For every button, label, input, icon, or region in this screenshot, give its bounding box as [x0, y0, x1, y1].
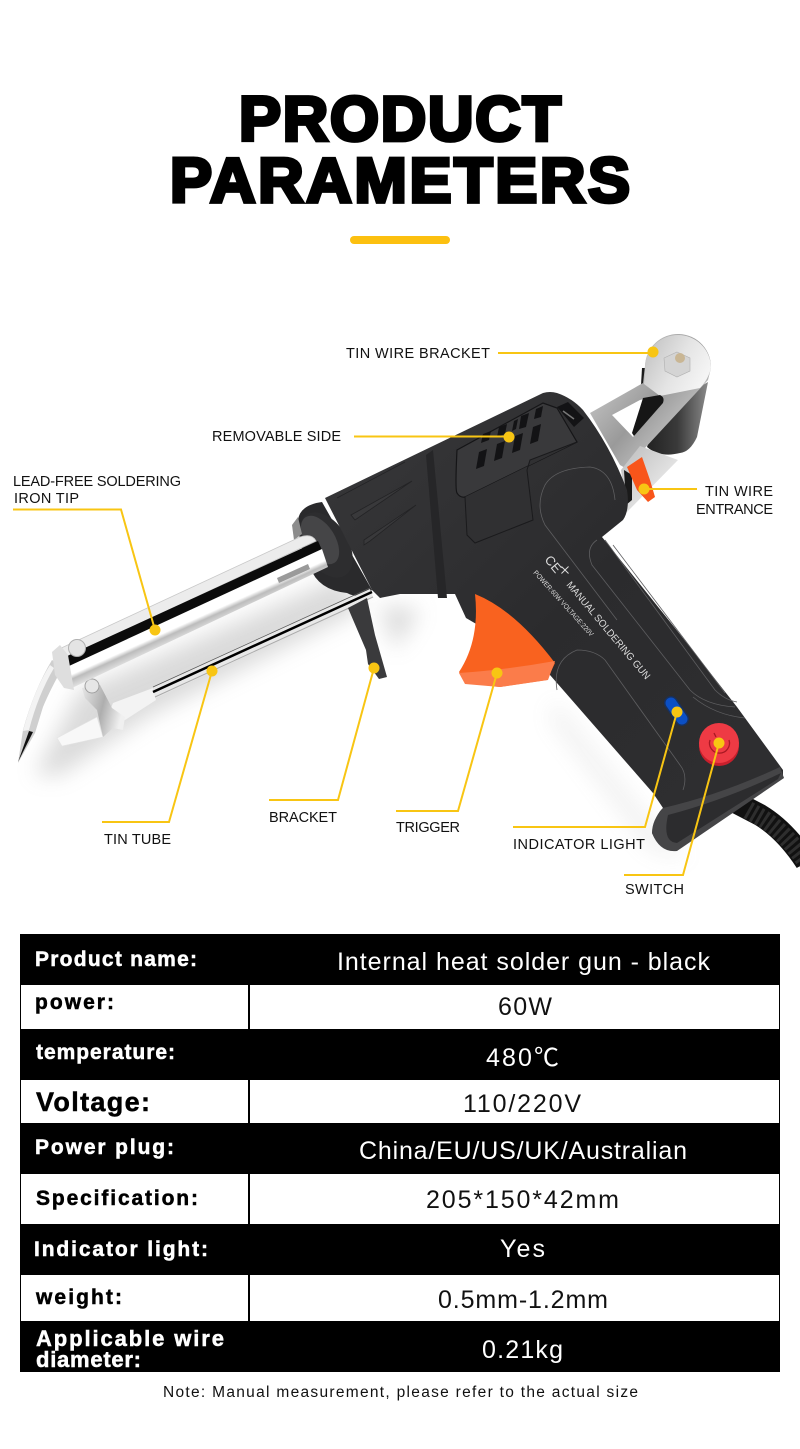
tip — [18, 660, 63, 763]
product image: soldering gun — [18, 334, 800, 862]
callout: tin wire bracket: TIN WIRE BRACKET — [346, 346, 490, 362]
bracket — [348, 598, 387, 679]
indicator light — [671, 703, 682, 719]
callout: removable side — [212, 429, 514, 445]
tin tube nozzle — [57, 679, 156, 746]
title — [170, 84, 630, 216]
row: power plug: China/EU/US/UK/Australian — [359, 1137, 687, 1165]
callout: lead-free soldering iron tip: IRON TIP — [14, 491, 79, 507]
CE marking: POWER:60W VOLTAGE:220V — [532, 570, 594, 638]
row: product name: Product name: — [35, 948, 197, 971]
row: applicable wire diameter: 0.21kg — [482, 1336, 563, 1364]
callout: tin wire entrance — [638, 484, 773, 518]
row: temperature: 480℃ — [486, 1044, 559, 1072]
row: power plug: Power plug: — [35, 1136, 174, 1159]
row: weight — [35, 1286, 608, 1314]
callout: trigger: TRIGGER — [396, 820, 460, 836]
parameter table — [20, 934, 780, 1372]
row: temperature: temperature: — [36, 1041, 175, 1064]
row: voltage: 110/220V — [463, 1090, 581, 1118]
row: applicable wire diameter — [36, 1326, 563, 1372]
callout: tin wire entrance: TIN WIRE — [705, 484, 773, 500]
top wire bracket — [590, 334, 711, 512]
hex nut — [664, 352, 690, 377]
vents — [476, 402, 584, 469]
callout: tin tube: TIN TUBE — [104, 832, 171, 848]
CE marking — [532, 552, 652, 682]
callout: tin tube — [102, 666, 218, 848]
collar — [288, 502, 372, 596]
row: temperature — [36, 1041, 559, 1072]
trigger — [459, 594, 555, 687]
wire entrance clip — [624, 457, 655, 505]
callout: indicator light — [513, 706, 682, 853]
callout: tin wire bracket — [346, 346, 658, 362]
row: applicable wire diameter: diameter: — [36, 1347, 141, 1372]
row: voltage: Voltage: — [36, 1087, 150, 1117]
gun body — [325, 392, 783, 850]
callout: trigger — [396, 668, 502, 836]
grip base inner — [666, 773, 781, 843]
row: power: 60W — [498, 993, 552, 1021]
callout: switch: SWITCH — [625, 882, 684, 898]
title accent bar — [350, 236, 450, 244]
row: product name — [35, 948, 710, 976]
title: PRODUCT — [239, 84, 561, 154]
callout: removable side: REMOVABLE SIDE — [212, 429, 341, 445]
row: weight: weight: — [35, 1286, 122, 1309]
callout: tin wire entrance: ENTRANCE — [696, 502, 773, 518]
body panels and ridges — [337, 403, 745, 790]
row: applicable wire diameter: Applicable wire — [36, 1326, 224, 1351]
cord — [735, 802, 800, 862]
grip shadow — [550, 700, 690, 860]
row: indicator light — [34, 1235, 545, 1263]
row: product name: Internal heat solder gun - black — [337, 948, 710, 976]
callout: bracket — [269, 662, 380, 826]
row: indicator light: Yes — [500, 1235, 545, 1263]
grip base — [652, 767, 784, 851]
row: indicator light: Indicator light: — [34, 1238, 208, 1261]
row: power plug — [35, 1136, 687, 1165]
row: voltage — [36, 1087, 581, 1118]
row: specification — [36, 1186, 619, 1214]
row: weight: 0.5mm-1.2mm — [438, 1286, 608, 1314]
gun shadow — [35, 575, 420, 775]
row: specification: 205*150*42mm — [426, 1186, 619, 1214]
footnote: Note: Manual measurement, please refer to the actual size — [163, 1384, 638, 1401]
row: power — [35, 991, 552, 1021]
tin tube — [153, 588, 373, 698]
callout: lead-free soldering iron tip: LEAD-FREE SOLDERING — [13, 474, 181, 490]
row: specification: Specification: — [36, 1187, 198, 1210]
callout: switch — [624, 738, 724, 898]
callout: bracket: BRACKET — [269, 810, 337, 826]
callout: indicator light: INDICATOR LIGHT — [513, 837, 645, 853]
soldering iron barrel — [52, 536, 328, 690]
row: power: power: — [35, 991, 114, 1014]
CE marking: CE — [542, 552, 565, 576]
callout: lead-free soldering iron tip — [13, 474, 181, 636]
CE marking: MANUAL SOLDERING GUN — [564, 580, 652, 682]
power switch — [699, 723, 739, 766]
title: PARAMETERS — [170, 146, 630, 216]
